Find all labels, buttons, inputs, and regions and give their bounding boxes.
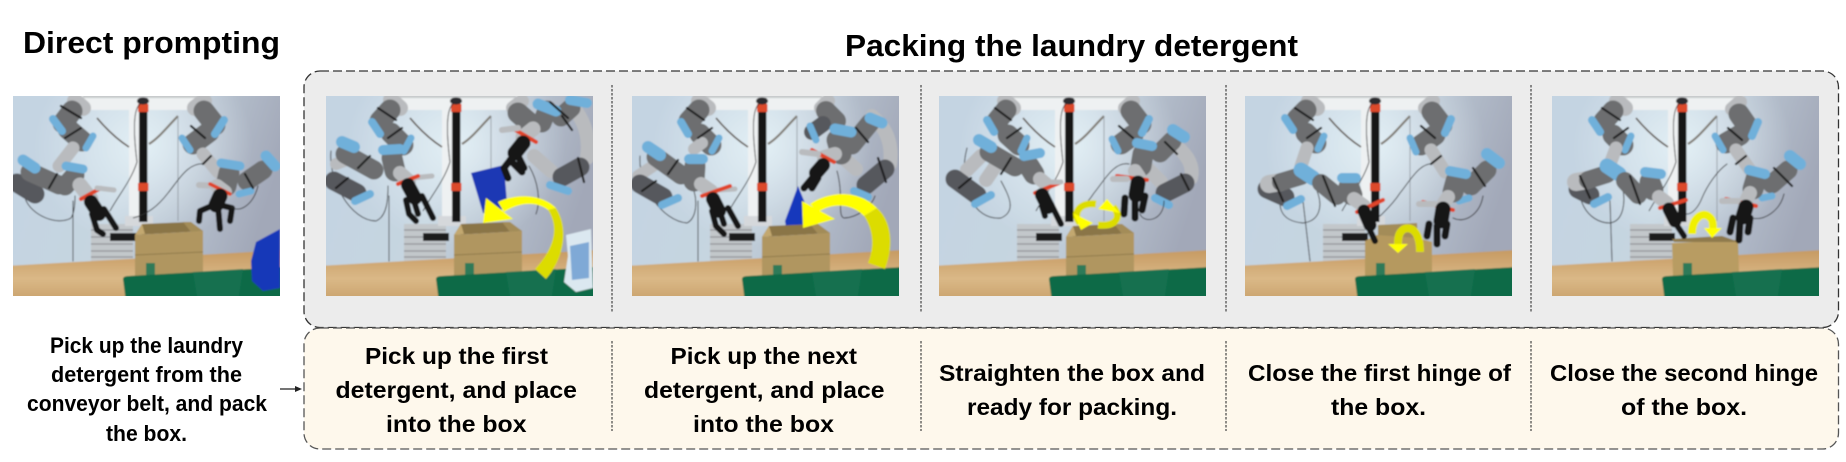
step text 1: detergent, and place [336,377,577,403]
open cardboard box [135,222,203,276]
step text 3 [939,360,1205,420]
second detergent on conveyor [564,229,593,292]
photo: step 1 pick up first detergent [326,96,593,296]
blue detergent held by gripper [471,165,507,216]
step text 3: ready for packing. [967,394,1177,420]
open cardboard box [1066,224,1134,278]
photo: step 3 straighten the box [939,96,1206,296]
step text 4: the box. [1331,394,1426,420]
photo: step 2 pick up next detergent [632,96,899,296]
box back flap [1378,223,1418,239]
left robot arm [638,101,738,261]
photo: step 5 close second hinge [1552,96,1819,296]
left robot arm [331,100,433,261]
right cable [133,164,206,218]
panel: step descriptions [304,328,1838,449]
detergent bag on conveyor [251,229,280,291]
photo: step 4 close first hinge [1245,96,1512,296]
blue detergent held by gripper [785,186,807,233]
step text 2 [644,343,884,437]
step text 1: into the box [386,411,526,437]
closed cardboard box [1672,236,1739,277]
title: Direct prompting: Direct prompting [23,25,280,60]
open cardboard box [762,224,830,278]
step text 3: Straighten the box and [939,360,1205,386]
left robot arm [17,101,116,261]
curved yellow arrow [1388,228,1420,253]
text: direct prompt: detergent from the [51,362,242,387]
text: direct prompt: conveyor belt, and pack [27,391,268,416]
curved yellow arrow [1692,215,1722,238]
right robot arm [1380,101,1499,244]
cardboard box with one flap closed [1365,235,1432,277]
curved yellow arrow [802,194,890,269]
text: direct prompt [27,333,268,446]
left robot arm [1267,101,1383,261]
right robot arm [1687,102,1800,240]
step text 5 [1550,360,1818,420]
open cardboard box [454,222,522,276]
step text 2: Pick up the next [670,343,857,369]
curved yellow arrow [483,196,563,279]
circular yellow arrows [1073,199,1120,230]
text: direct prompt: Pick up the laundry [50,333,244,358]
text: direct prompt: the box. [106,421,187,446]
photo: direct prompting initial state [13,96,280,296]
panel: robot image strip [304,71,1838,328]
left robot arm [1576,101,1686,261]
step text 5: of the box. [1621,394,1747,420]
title: Packing the laundry detergent: Packing the laundry detergent [845,28,1298,63]
step text 2: into the box [693,411,834,437]
right robot arm [182,101,275,229]
right robot arm gripping detergent [802,101,891,218]
right robot arm gripping detergent [502,100,588,214]
arrow: prompt to steps [280,386,302,392]
left robot arm [955,101,1061,224]
step text 4 [1248,360,1511,420]
right robot arm [1074,101,1192,220]
step text 5: Close the second hinge [1550,360,1818,386]
step text 1: Pick up the first [365,343,548,369]
step text 4: Close the first hinge of [1248,360,1511,386]
step text 2: detergent, and place [644,377,884,403]
step text 1 [336,343,577,437]
